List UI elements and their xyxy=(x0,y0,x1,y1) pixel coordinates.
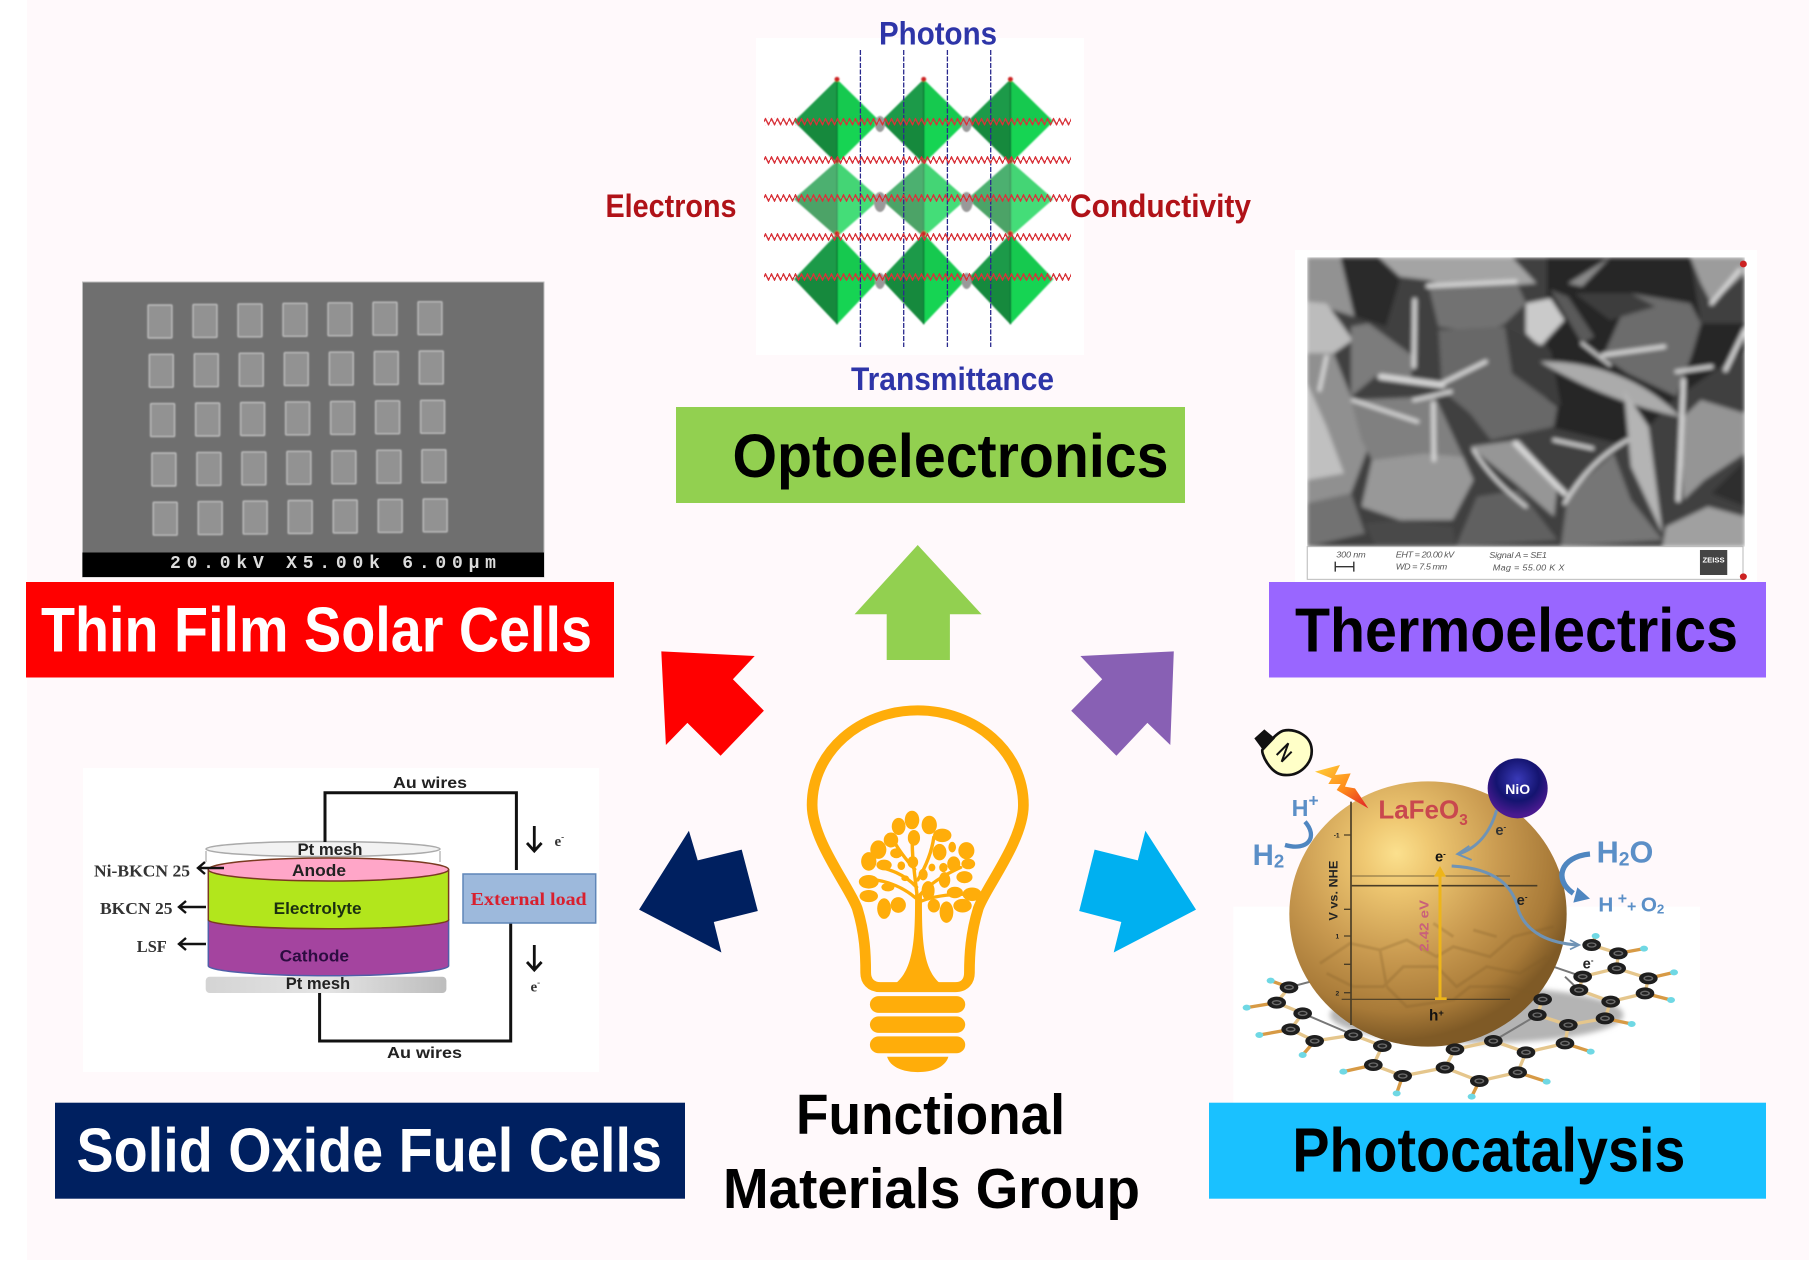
title: Functional Materials Group: Materials Group xyxy=(723,1157,1140,1221)
arrow: purple up-right xyxy=(1071,651,1174,756)
band gap arrow xyxy=(1417,866,1447,999)
charge labels: e xyxy=(1583,956,1591,972)
tree xyxy=(859,811,982,983)
photon dashed lines xyxy=(860,50,991,347)
title: Functional Materials Group: Functional xyxy=(796,1083,1065,1147)
icon: light bulb with tree xyxy=(812,710,1023,1072)
faint lattice within sphere xyxy=(1320,923,1553,1007)
electron flow arrows: e xyxy=(530,980,537,996)
charge labels: - xyxy=(1503,823,1506,832)
bulb base xyxy=(870,996,965,1072)
electrode grid xyxy=(148,302,447,535)
label: Photocatalysis: Photocatalysis xyxy=(1292,1116,1685,1186)
external load xyxy=(463,874,596,923)
shadow xyxy=(1330,987,1623,1043)
external load: External load xyxy=(471,889,587,909)
top Pt mesh xyxy=(206,842,440,862)
arrow: cyan right xyxy=(1079,831,1196,952)
water oxidation half reaction: O xyxy=(1641,894,1657,917)
SEM info strip: 300 nm xyxy=(1336,550,1366,559)
NiO sphere xyxy=(1488,758,1548,818)
panel: thin film SEM image: 20.0kV X5.00k 6.00μm xyxy=(170,554,496,574)
SEM info strip: Mag = 55.00 K X xyxy=(1493,563,1566,573)
label: Photocatalysis xyxy=(1209,1103,1766,1199)
text: Conductivity: Conductivity xyxy=(1070,188,1251,224)
icon: small light bulb xyxy=(1254,729,1312,775)
water oxidation half reaction: H xyxy=(1597,836,1619,870)
arrow: green up xyxy=(855,545,982,660)
text: LaFeO3: 3 xyxy=(1459,812,1468,829)
label: Thin Film Solar Cells xyxy=(26,582,614,678)
SEM info strip: Signal A = SE1 xyxy=(1489,550,1547,560)
cell stack xyxy=(208,858,449,976)
electron flow arrows: - xyxy=(537,978,540,988)
hydrogen half reaction: H xyxy=(1253,839,1274,872)
hydrogen half reaction: H xyxy=(1292,795,1309,821)
charge labels: - xyxy=(1443,849,1446,858)
label: Solid Oxide Fuel Cells: Solid Oxide Fuel Cells xyxy=(76,1116,662,1186)
panel: solid oxide fuel cell diagram: Electrolyte xyxy=(274,899,362,918)
energy axis: 1 xyxy=(1335,934,1339,941)
panel: solid oxide fuel cell diagram xyxy=(83,768,599,1072)
electron wavy lines xyxy=(764,118,1071,281)
charge labels: + xyxy=(1438,1008,1444,1018)
text: Electrons: Electrons xyxy=(606,188,736,224)
electron flow arrows: e xyxy=(554,834,561,850)
panel: solid oxide fuel cell diagram: Pt mesh xyxy=(298,840,362,859)
panel: photocatalysis diagram xyxy=(1233,729,1700,1103)
water oxidation half reaction: H xyxy=(1598,894,1613,917)
energy axis xyxy=(1326,802,1537,1025)
water oxidation half reaction: 2 xyxy=(1619,849,1630,870)
charge labels: e xyxy=(1495,823,1503,839)
charge labels: e xyxy=(1517,893,1525,909)
water oxidation half reaction xyxy=(1562,836,1664,917)
graphene sheet behind xyxy=(1289,967,1583,1041)
charge labels: - xyxy=(1525,893,1528,902)
title: Functional Materials Group xyxy=(723,1083,1140,1221)
charge labels: - xyxy=(1591,956,1594,965)
electron flow arrows: - xyxy=(561,832,564,842)
label: Solid Oxide Fuel Cells xyxy=(55,1103,685,1199)
text: LaFeO3: LaFeO xyxy=(1378,794,1459,824)
label: Optoelectronics: Optoelectronics xyxy=(732,422,1168,490)
SEM info strip: WD = 7.5 mm xyxy=(1396,562,1447,571)
layer material labels xyxy=(94,862,224,956)
water oxidation half reaction: + xyxy=(1627,899,1641,916)
LaFeO3 sphere xyxy=(1289,781,1567,1047)
water oxidation half reaction: 2 xyxy=(1657,902,1664,917)
layer material labels: Ni-BKCN 25 xyxy=(94,862,190,881)
band gap arrow: 2.42 eV xyxy=(1417,899,1431,952)
SEM info strip: ZEISS xyxy=(1702,556,1725,565)
SEM info strip xyxy=(1307,261,1747,580)
layer material labels: LSF xyxy=(137,937,167,956)
octahedra lattice xyxy=(794,77,1053,324)
panel: optoelectronics crystal diagram xyxy=(756,38,1084,355)
hydrogen half reaction: + xyxy=(1309,791,1319,811)
energy axis: 2 xyxy=(1335,990,1339,997)
arrow: navy left xyxy=(639,831,758,952)
label: Thin Film Solar Cells: Thin Film Solar Cells xyxy=(41,596,592,666)
panel: solid oxide fuel cell diagram: Au wires xyxy=(393,775,467,792)
bottom Pt mesh xyxy=(206,977,446,993)
NiO sphere: NiO xyxy=(1505,781,1530,797)
panel: solid oxide fuel cell diagram: Cathode xyxy=(280,946,349,966)
label: Optoelectronics xyxy=(676,407,1185,503)
water oxidation half reaction: + xyxy=(1613,891,1627,908)
graphene sheet front xyxy=(1243,933,1678,1100)
icon: lightning bolt xyxy=(1315,765,1368,808)
water oxidation half reaction: O xyxy=(1630,836,1653,870)
electron pathways xyxy=(1452,810,1579,949)
text: Photons: Photons xyxy=(879,16,997,52)
charge labels xyxy=(1429,823,1594,1025)
label: Thermoelectrics: Thermoelectrics xyxy=(1295,596,1738,666)
energy axis: -1 xyxy=(1334,832,1340,839)
bulb outline xyxy=(812,710,1023,987)
wires xyxy=(320,793,516,1041)
panel: solid oxide fuel cell diagram: Au wires xyxy=(387,1045,462,1062)
arrow: red up-left xyxy=(661,651,764,756)
panel: thermoelectrics SEM image xyxy=(1295,250,1757,582)
layer material labels: BKCN 25 xyxy=(100,899,172,918)
charge labels: e xyxy=(1435,850,1443,866)
panel: solid oxide fuel cell diagram: Anode xyxy=(292,861,346,880)
panel: thin film SEM image xyxy=(82,282,544,577)
SEM info strip: EHT = 20.00 kV xyxy=(1396,550,1455,559)
energy axis: V vs. NHE xyxy=(1326,861,1340,921)
SEM micrograph texture xyxy=(1307,257,1745,547)
hydrogen half reaction: 2 xyxy=(1274,851,1284,872)
text: Transmittance: Transmittance xyxy=(851,361,1054,397)
label: Thermoelectrics xyxy=(1269,582,1766,678)
hydrogen half reaction xyxy=(1253,791,1319,872)
electron flow arrows xyxy=(527,826,564,996)
charge labels: h xyxy=(1429,1008,1438,1025)
panel: solid oxide fuel cell diagram: Pt mesh xyxy=(286,974,350,993)
